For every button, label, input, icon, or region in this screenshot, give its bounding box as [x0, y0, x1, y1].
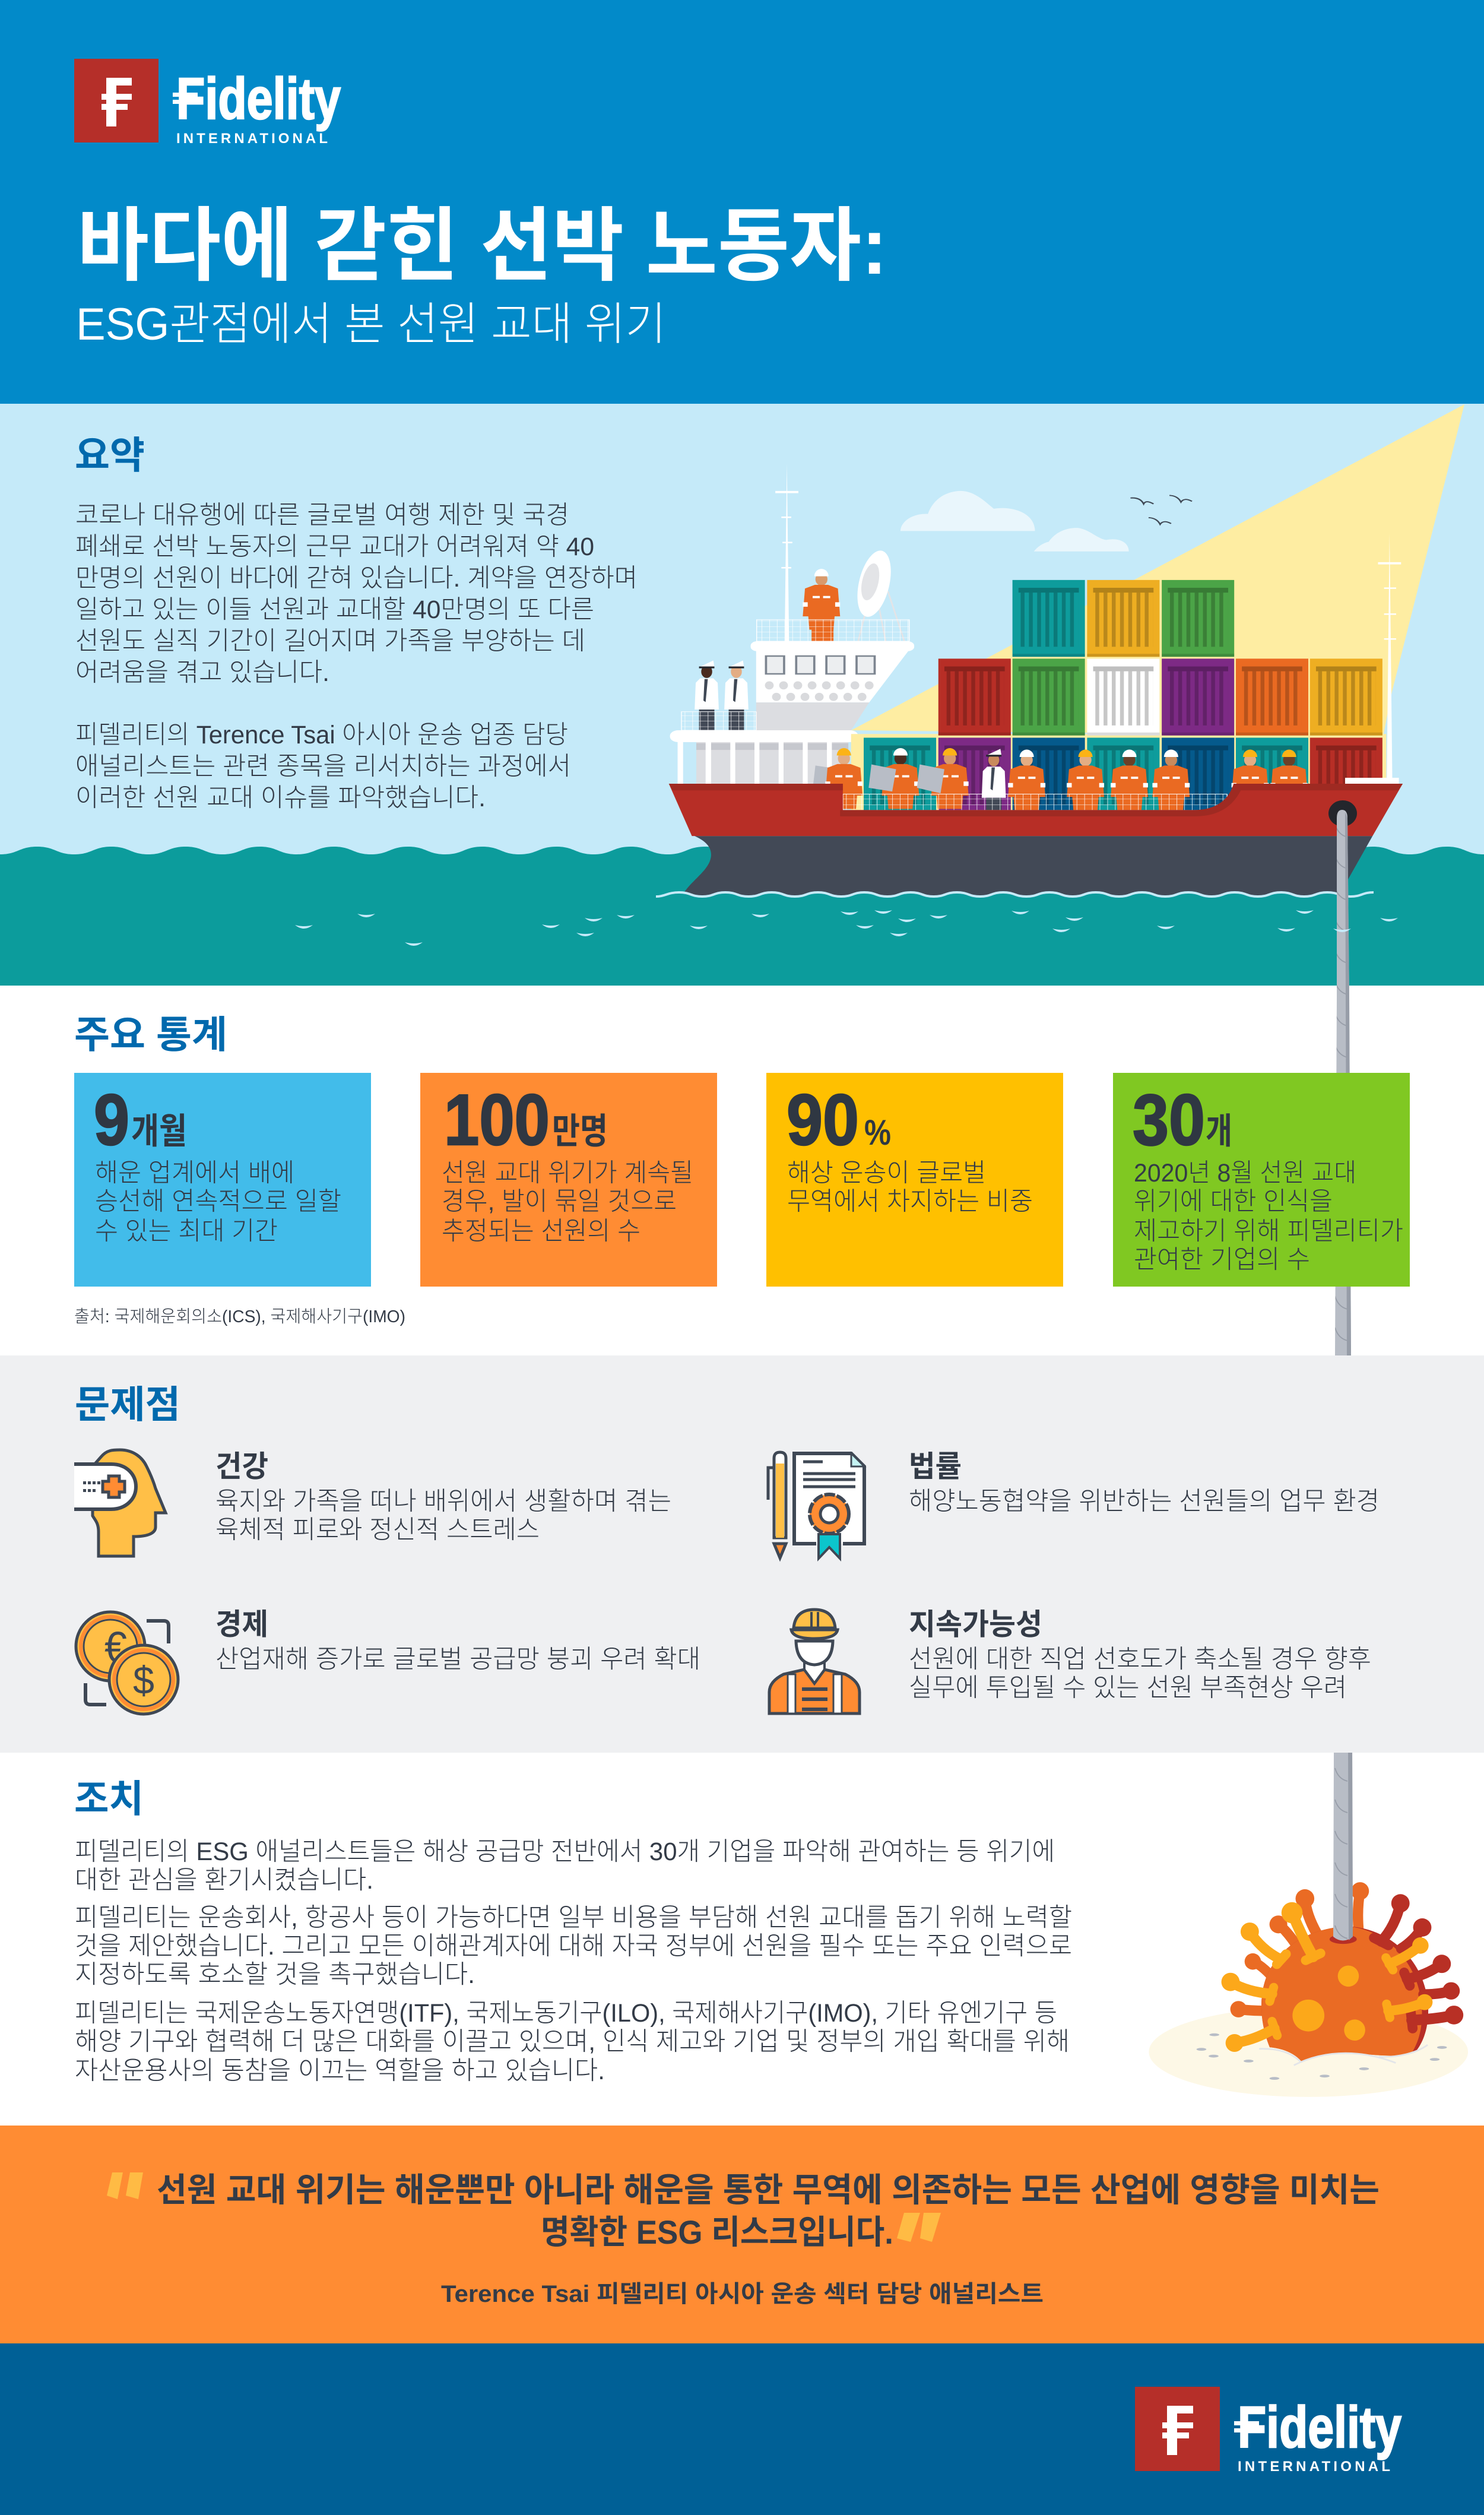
- text block: summary: 피델리티의 Terence Tsai 아시아 운송 업종 담당: [75, 721, 568, 749]
- text: economy: 산업재해 증가로 글로벌 공급망 붕괴 우려 확대: [215, 1645, 700, 1674]
- quote attribution: Terence Tsai 피델리티 아시아 운송 섹터 담당 애널리스트: [441, 2281, 1044, 2307]
- panel: header background: [0, 0, 1484, 404]
- icon: worker with hard hat: [769, 1610, 860, 1713]
- text: law: [909, 1450, 1380, 1516]
- text block: summary: 일하고 있는 이들 선원과 교대할 40만명의 또 다른: [75, 596, 594, 624]
- stat card: 9 months: 해운 업계에서 배에: [95, 1159, 294, 1187]
- quote text: [157, 2171, 1380, 2251]
- masts: [775, 463, 1401, 778]
- text block: summary: [75, 501, 638, 812]
- light beam: [851, 404, 1464, 736]
- bow platform: [1345, 778, 1399, 784]
- logo: Fidelity International (header): Fidelity: [176, 66, 341, 131]
- text: health: 건강: [215, 1450, 268, 1483]
- text block: actions: 자산운용사의 동참을 이끄는 역할을 하고 있습니다.: [75, 2057, 605, 2085]
- icon: head with medical cross: [74, 1450, 166, 1556]
- text block: actions: 해양 기구와 협력해 더 많은 대화를 이끌고 있으며, 인식 제고와 기업 및 정부의 개입 확대를 위해: [75, 2028, 1070, 2056]
- stat card: 1 million: 선원 교대 위기가 계속될: [442, 1159, 693, 1187]
- birds: [1130, 495, 1192, 524]
- stat card: 30 companies: 관여한 기업의 수: [1134, 1246, 1310, 1274]
- orange spikes: [1231, 1882, 1369, 2017]
- text: sustainability: [909, 1608, 1371, 1702]
- text: law: 법률: [909, 1450, 962, 1483]
- panel: sky background: [0, 404, 1484, 986]
- quote marks closing: [897, 2213, 941, 2242]
- title: 바다에 갇힌 선박 노동자:: [77, 201, 887, 291]
- text block: actions: 지정하도록 호소할 것을 촉구했습니다.: [75, 1960, 475, 1989]
- text block: summary: 코로나 대유행에 따른 글로벌 여행 제한 및 국경: [75, 501, 569, 530]
- text block: actions: 것을 제안했습니다. 그리고 모든 이해관계자에 대해 자국 정부에 선원을 필수 또는 주요 인력으로: [75, 1932, 1072, 1960]
- text: law: 해양노동협약을 위반하는 선원들의 업무 환경: [909, 1487, 1380, 1516]
- stat card: 30 companies: 2020년 8월 선원 교대: [1134, 1159, 1356, 1187]
- officers on deck: [681, 660, 756, 730]
- sand: [1149, 2007, 1468, 2097]
- stat card: 1 million: 만명: [552, 1111, 608, 1151]
- text block: actions: [75, 1838, 1072, 2085]
- stat card: 90 percent: 무역에서 차지하는 비중: [787, 1187, 1033, 1216]
- stat card: 30 companies: 30: [1133, 1079, 1205, 1160]
- sea ripples: [295, 910, 1398, 946]
- text: sustainability: 지속가능성: [909, 1608, 1042, 1641]
- stat card: 9 months: [74, 1073, 371, 1287]
- text: sustainability: 실무에 투입될 수 있는 선원 부족현상 우려: [909, 1674, 1347, 1702]
- text block: actions: 피델리티는 운송회사, 항공사 등이 가능하다면 일부 비용을 부담해 선원 교대를 돕기 위해 노력할: [75, 1903, 1072, 1932]
- logo: Fidelity International (footer): Fidelity: [1238, 2394, 1401, 2460]
- text: economy: [215, 1608, 700, 1674]
- worker on bridge: [757, 569, 909, 642]
- source note: 출처: 국제해운회의소(ICS), 국제해사기구(IMO): [74, 1307, 405, 1326]
- text block: actions: 피델리티의 ESG 애널리스트들은 해상 공급망 전반에서 30개 기업을 파악해 관여하는 등 위기에: [75, 1838, 1055, 1866]
- satellite dish: [852, 549, 904, 641]
- quote marks opening: [107, 2172, 143, 2199]
- icon: coins: [76, 1612, 178, 1714]
- ripple on rope: [1333, 929, 1351, 932]
- stat card: 9 months: 승선해 연속적으로 일할: [95, 1187, 341, 1216]
- panel: quote: [0, 2126, 1484, 2343]
- stat card: 90 percent: %: [864, 1113, 891, 1152]
- icon: certificate and pencil: [768, 1452, 864, 1559]
- virus body: [1259, 1926, 1428, 2066]
- text block: summary: 폐쇄로 선박 노동자의 근무 교대가 어려워져 약 40: [75, 533, 594, 561]
- yellow spikes: [1231, 1913, 1425, 2043]
- text block: actions: 피델리티는 국제운송노동자연맹(ITF), 국제노동기구(ILO), 국제해사기구(IMO), 기타 유엔기구 등: [75, 1999, 1057, 2028]
- text: health: [215, 1450, 671, 1544]
- logo: Fidelity International (header): INTERNATIONAL: [176, 131, 328, 147]
- lower superstructure: [670, 730, 858, 786]
- illustration: virus anchor on sand: [1149, 1882, 1468, 2097]
- quote text: 선원 교대 위기는 해운뿐만 아니라 해운을 통한 무역에 의존하는 모든 산업에 영향을 미치는: [157, 2171, 1380, 2209]
- logo: Fidelity International (header): [74, 59, 341, 147]
- heading: summary: 요약: [75, 434, 145, 477]
- sea: [0, 847, 1484, 986]
- stat card: 1 million: 추정되는 선원의 수: [442, 1217, 640, 1246]
- stat card: 1 million: 경우, 발이 묶일 것으로: [442, 1187, 677, 1216]
- red spikes: [1374, 1903, 1454, 2028]
- text block: summary: 선원도 실직 기간이 길어지며 가족을 부양하는 데: [75, 627, 585, 655]
- stat card: 90 percent: 해상 운송이 글로벌: [787, 1159, 986, 1187]
- text: economy: 경제: [215, 1608, 268, 1641]
- icon: coins: $: [133, 1658, 154, 1702]
- panel: issues background: [0, 1355, 1484, 1753]
- text: health: 육지와 가족을 떠나 배위에서 생활하며 겪는: [215, 1487, 671, 1516]
- icon: coins: €: [104, 1623, 127, 1672]
- quote text: 명확한 ESG 리스크입니다.: [541, 2213, 893, 2251]
- logo: Fidelity International (footer): [1135, 2387, 1401, 2475]
- illustration: container ship: [669, 463, 1403, 899]
- crew on main deck: [813, 748, 1308, 819]
- text block: summary: 만명의 선원이 바다에 갇혀 있습니다. 계약을 연장하며: [75, 564, 638, 593]
- text block: summary: 어려움을 겪고 있습니다.: [75, 658, 329, 687]
- text block: actions: 대한 관심을 환기시켰습니다.: [75, 1866, 373, 1895]
- bridge: [751, 641, 914, 730]
- stat card: 9 months: 9: [94, 1079, 129, 1160]
- stat card: 9 months: 개월: [131, 1111, 187, 1151]
- logo: Fidelity International (footer): INTERNATIONAL: [1238, 2459, 1390, 2475]
- clouds: [900, 491, 1129, 552]
- containers: [851, 580, 1386, 815]
- stat card: 9 months: 수 있는 최대 기간: [95, 1217, 278, 1246]
- front sea with wave line: [656, 892, 1374, 986]
- stat card: 30 companies: 제고하기 위해 피델리티가: [1134, 1217, 1403, 1246]
- subtitle: ESG관점에서 본 선원 교대 위기: [76, 299, 666, 350]
- text: sustainability: 선원에 대한 직업 선호도가 축소될 경우 향후: [909, 1645, 1371, 1674]
- text: health: 육체적 피로와 정신적 스트레스: [215, 1516, 540, 1544]
- heading: issues: 문제점: [75, 1383, 180, 1426]
- stat card: 30 companies: 위기에 대한 인식을: [1134, 1187, 1333, 1216]
- anchor rope: [1333, 810, 1353, 1940]
- stat card: 90 percent: [766, 1073, 1063, 1287]
- stat card: 30 companies: [1113, 1073, 1410, 1287]
- hull: [669, 784, 1403, 899]
- stat card: 1 million: [420, 1073, 717, 1287]
- panel: footer: [0, 2343, 1484, 2515]
- stat card: 1 million: 100: [444, 1079, 550, 1160]
- stat card: 30 companies: 개: [1206, 1111, 1232, 1151]
- heading: actions: 조치: [74, 1778, 144, 1820]
- anchor ring on hull: [1328, 800, 1357, 826]
- heading: key statistics: 주요 통계: [74, 1013, 227, 1056]
- stat card: 90 percent: 90: [787, 1079, 859, 1160]
- text block: summary: 애널리스트는 관련 종목을 리서치하는 과정에서: [75, 752, 571, 781]
- text block: summary: 이러한 선원 교대 이슈를 파악했습니다.: [75, 784, 486, 812]
